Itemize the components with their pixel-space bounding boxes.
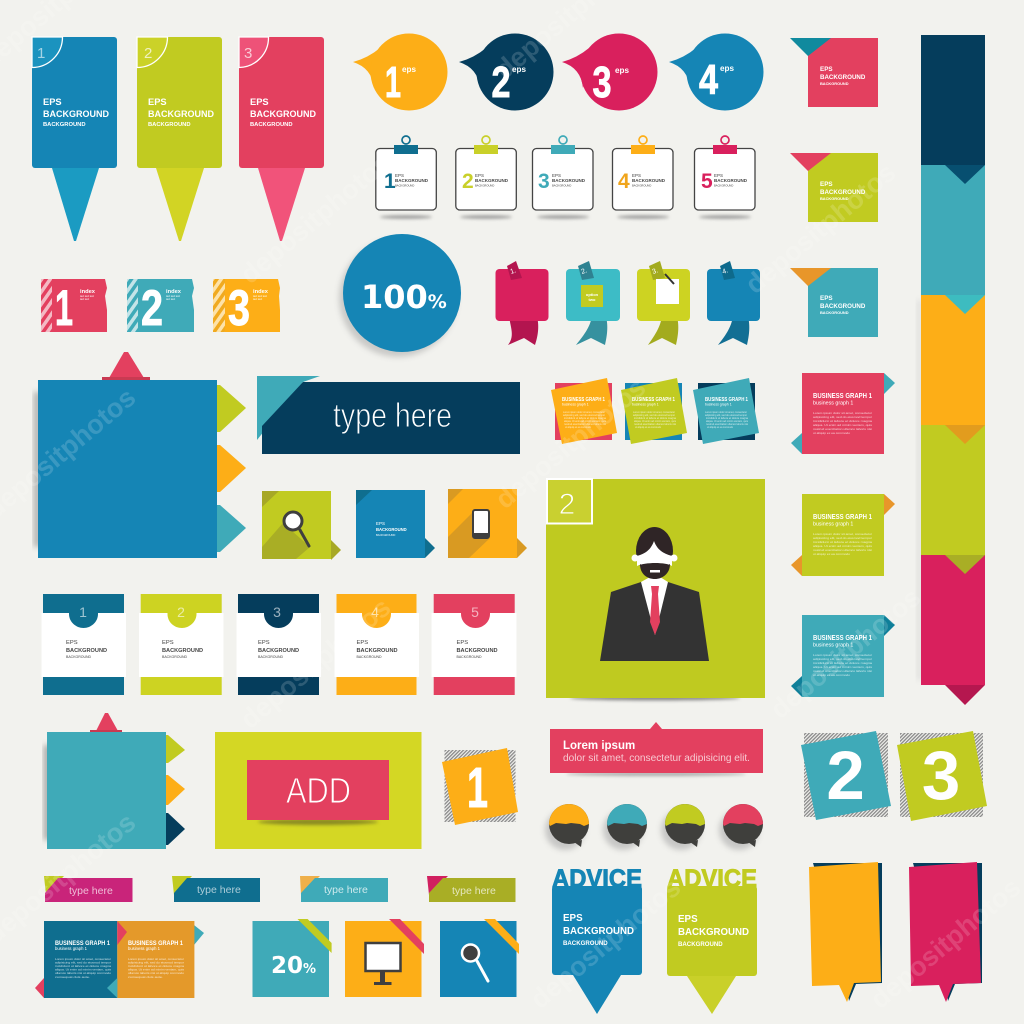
rotated note teal: BUSINESS GRAPH 1 [705,397,748,403]
clipboard note 4: EPS [632,173,641,178]
card 20 percent: 20% [271,953,316,979]
fold card teal: BACKGROUND [820,303,866,310]
pointer tag 3: 3 [244,45,252,62]
number note 1: 1 [467,756,488,820]
mini label 3 [300,876,388,902]
numbered card 2 [139,594,224,695]
split bubble red [719,804,763,850]
clipboard note 1: BACKGROUND [395,178,429,183]
pointer tag 3 [239,37,324,241]
numbered card 2: BACKGROUND [162,648,203,654]
double info card: ullamco laboris nisi ut aliquip commodo [55,971,111,975]
fold card red: BACKGROUND [820,81,849,86]
double info card: BUSINESS GRAPH 1 [128,940,183,947]
numbered sticker 2: 2 [141,280,163,336]
rotated note olive: aliqua. Ut enim ad minim veniam, quis [634,419,676,423]
rotated note orange: business graph 1 [562,402,589,406]
ribbon badge blue: 4. [721,267,729,276]
lorem ipsum banner: dolor sit amet, consectetur adipisicing elit. [563,753,750,764]
numbered card 1 [42,594,126,695]
fold card teal: EPS [820,295,833,302]
mini label 2: type here [197,884,241,896]
clipboard note 2 [456,136,516,219]
rotated note olive [621,378,687,444]
fold card red: EPS [820,66,833,73]
numbered sticker 3: index [253,289,268,295]
numbered card 4: 4 [371,604,379,620]
ribbon badge olive [637,261,690,345]
numbered sticker 3: text text [253,297,262,301]
rotated note olive: incididunt ut labore et dolore magna [634,416,676,420]
info card olive: Lorem ipsum dolor sit amet, consectetur [813,532,872,536]
ribbon badge teal [566,261,620,345]
clipboard note 3: BACKGROUND [552,178,586,183]
lorem ipsum banner: Lorem ipsum [563,740,635,752]
info card olive: ut aliquip ex ea commodo [813,552,850,556]
rotated note teal: adipisicing elit, sed do eiusmod tempor [705,413,747,417]
percent circle 100%: 100% [361,278,447,316]
mini label 2 [172,876,260,902]
clipboard note 1: EPS [395,173,404,178]
speech bubble 1 [353,34,448,110]
rotated note teal: incididunt ut labore et dolore magna [706,416,748,420]
number note 3: 3 [922,737,960,814]
numbered card 3: EPS [258,640,270,646]
watermark: depositphotos [235,592,396,735]
double info card: aliqua. Ut enim ad minim veniam, quis [128,968,185,972]
speech bubble 4 [669,34,764,110]
numbered sticker 1: index [80,289,95,295]
number note 2 [801,731,891,820]
ribbon badge teal: 2. [580,267,588,276]
pointer tag 3: EPS [250,97,269,107]
double info card: consequat duis aute. [55,975,90,979]
info card teal: business graph 1 [813,642,853,648]
info card teal: BUSINESS GRAPH 1 [813,633,872,642]
info card teal: aliqua. Ut enim ad minim veniam, quis [813,665,873,669]
double info card: ullamco laboris nisi ut aliquip commodo [128,971,184,975]
fold card olive: BACKGROUND [820,189,866,196]
card monitor [345,919,424,997]
numbered card 5: BACKGROUND [456,655,482,659]
clipboard note 3: 3 [538,170,550,193]
rotated note orange: aliqua. Ut enim ad minim veniam, quis [564,419,606,423]
clipboard note 2: 2 [462,170,474,193]
speech bubble 3: 3 [592,58,612,107]
icon card blue text [356,490,435,558]
advice tag blue: EPS [563,913,583,924]
advice tag blue: BACKGROUND [563,926,634,937]
numbered card 2: EPS [162,640,174,646]
ribbon badge magenta [496,261,548,345]
lorem ipsum banner [550,722,763,776]
icon: businessman [600,527,709,661]
double info card: aliqua. Ut enim ad minim veniam, quis [55,968,112,972]
info card red: incididunt ut labore et dolore magna [813,419,872,423]
segment olive [921,425,985,555]
right half [117,921,194,998]
fold card olive: BACKGROUND [820,196,849,201]
split bubble teal [603,804,647,850]
pointer tag 2: BACKGROUND [148,122,191,128]
rotated note orange [551,378,617,444]
icon card magnifier [262,491,341,560]
pointer tag 2: 2 [144,45,152,62]
info card olive: incididunt ut labore et dolore magna [813,540,872,544]
icon card blue text: EPS [376,521,385,526]
advice tag blue [552,865,642,1014]
teal note with tabs [44,713,185,849]
mini label 1 [44,876,132,902]
tab olive [166,735,185,763]
icon card phone [448,489,527,558]
rotated note olive: nostrud exercitation ullamco laboris nisi [634,422,676,426]
speech bubble 4: eps [720,64,735,73]
pointer tag 3: BACKGROUND [250,109,316,119]
numbered card 5: EPS [456,640,468,646]
watermark: depositphotos [765,582,926,725]
split bubble olive [661,804,705,850]
clipboard note 5: BACKGROUND [714,184,733,188]
double info card: incididunt ut labore et dolore magna [128,964,184,968]
info card teal: Lorem ipsum dolor sit amet, consectetur [813,653,872,657]
numbered sticker 2: text text [166,297,175,301]
rotated note orange: ut aliquip ex ea commodo [565,425,591,429]
speech bubble 1: 1 [385,58,401,107]
mini label 4: type here [452,885,496,897]
pointer tag 2: BACKGROUND [148,109,214,119]
icon card blue text: BACKGROUND [376,527,407,532]
number note 3 [897,731,987,821]
rotated note teal: Lorem ipsum dolor sit amet, consectetur [705,410,747,414]
info card teal: adipisicing elit, sed do eiusmod tempor [813,657,872,661]
advice tag olive: EPS [678,914,698,925]
speech bubble 2: 2 [492,58,510,107]
card 20 percent [252,919,332,997]
numbered card 4 [334,594,419,695]
rotated note olive: ut aliquip ex ea commodo [635,425,661,429]
info card olive: aliqua. Ut enim ad minim veniam, quis [813,544,873,548]
clipboard note 3 [532,136,593,219]
numbered sticker 2: index [166,289,181,295]
segment navy [921,35,985,165]
clipboard note 2: EPS [475,173,484,178]
info card red [791,373,895,454]
double info card: incididunt ut labore et dolore magna [55,964,111,968]
left half [44,921,117,998]
ribbon badge teal: two [589,297,596,302]
speech bubble 3 [562,34,658,110]
advice tag olive [667,865,757,1014]
rotated note teal: aliqua. Ut enim ad minim veniam, quis [706,419,748,423]
numbered sticker 1: text text text [80,294,94,298]
pointer tag 2: EPS [148,97,167,107]
advice tag olive: BACKGROUND [678,927,749,938]
numbered card 5: 5 [471,604,479,620]
icon card blue text: BACKGROUND [376,533,395,537]
mini label 3: type here [324,884,368,896]
clipboard note 4 [612,136,673,219]
info card teal: incididunt ut labore et dolore magna [813,661,872,665]
clipboard note 4: BACKGROUND [632,178,666,183]
type here banner navy [257,376,520,454]
fold arrow navy [945,165,985,184]
numbered card 4: EPS [356,640,368,646]
fold card olive: EPS [820,181,833,188]
info card olive: business graph 1 [813,522,853,528]
numbered card 4: BACKGROUND [356,648,398,654]
number note 2: 2 [826,737,865,814]
numbered sticker 2: text text text [166,294,180,298]
numbered sticker 3 [213,279,280,336]
number box [547,479,592,524]
advice tag olive: BACKGROUND [678,941,723,948]
add button panel: ADD [286,770,351,811]
clipboard note 5 [694,136,755,219]
numbered card 3: BACKGROUND [258,648,299,654]
ribbon badge olive: 3. [651,267,659,276]
clipboard note 3: EPS [552,173,561,178]
speech bubble 4: 4 [699,56,719,103]
rotated note orange: nostrud exercitation ullamco laboris nisi [564,422,606,426]
speech bubble 1: eps [402,65,417,74]
ribbon badge teal: option [586,292,599,297]
card magnifier [440,919,519,997]
fold card olive [790,153,878,222]
add button panel [215,732,422,849]
speech note orange [809,862,882,1002]
type here banner navy: type here [333,397,452,435]
pointer tag 1: 1 [37,45,45,62]
clipboard note 1: BACKGROUND [395,184,414,188]
rotated note olive: business graph 1 [632,402,659,406]
numbered sticker 1: 1 [55,280,73,336]
rotated note teal: nostrud exercitation ullamco laboris nisi [706,422,748,426]
numbered card 2: 2 [177,604,185,620]
rotated note orange: incididunt ut labore et dolore magna [564,416,606,420]
numbered card 1: BACKGROUND [66,648,107,654]
info card teal: nostrud exercitation ullamco laboris nisi [813,669,872,673]
pointer tag 2 [137,37,222,241]
fold arrow olive [945,555,985,574]
segment teal [921,165,985,295]
clipboard note 1: 1 [384,170,396,193]
double info card: business graph 1 [128,946,161,951]
segment magenta [921,555,985,685]
double info card: Lorem ipsum dolor sit amet, consectetur [128,957,184,961]
segment orange [921,295,985,425]
numbered sticker 1 [41,279,107,336]
double info card: Lorem ipsum dolor sit amet, consectetur [55,957,111,961]
info card red: BUSINESS GRAPH 1 [813,391,872,400]
advice tag olive: ADVICE [667,865,757,893]
clipboard note 4: 4 [618,170,630,193]
split bubble orange [545,804,589,850]
watermark: depositphotos [525,872,686,1015]
info card red: ut aliquip ex ea commodo [813,431,850,435]
number note 1 [442,748,518,825]
mini label 4 [427,876,516,902]
numbered card 3 [236,594,321,695]
pointer tag 1: EPS [43,97,62,107]
rotated note teal: business graph 1 [705,402,732,406]
numbered card 1: 1 [79,604,87,620]
watermark: depositphotos [490,372,651,515]
panel: person card: 2 [559,488,575,521]
ribbon badge blue [707,261,760,345]
rotated note olive: Lorem ipsum dolor sit amet, consectetur [633,410,675,414]
pointer tag 1: BACKGROUND [43,109,109,119]
numbered card 1: BACKGROUND [66,655,92,659]
clipboard note 5: EPS [714,173,723,178]
info card red: nostrud exercitation ullamco laboris nisi [813,427,872,431]
info card olive [791,494,895,576]
numbered sticker 2 [127,279,194,336]
numbered card 3: BACKGROUND [258,655,284,659]
pointer tag 1: BACKGROUND [43,122,86,128]
info card red: business graph 1 [813,400,853,406]
watermark: depositphotos [740,157,901,300]
numbered sticker 3: 3 [228,280,250,336]
fold card teal: BACKGROUND [820,310,849,315]
clipboard note 4: BACKGROUND [632,184,651,188]
rotated note orange: adipisicing elit, sed do eiusmod tempor [563,413,605,417]
watermark: depositphotos [865,872,1024,1015]
advice tag blue: BACKGROUND [563,940,608,947]
fold card teal [790,268,878,337]
speech note magenta [909,862,982,1002]
clipboard note 5: 5 [701,170,713,193]
info card olive: nostrud exercitation ullamco laboris nisi [813,548,872,552]
watermark: depositphotos [235,147,396,290]
numbered card 3: 3 [273,604,281,620]
info card red: Lorem ipsum dolor sit amet, consectetur [813,411,872,415]
numbered card 5 [432,594,516,695]
numbered sticker 1: text text [80,297,89,301]
tab orange [166,775,185,805]
numbered card 4: BACKGROUND [356,655,382,659]
speech bubble 3: eps [615,66,630,75]
double info card [35,921,204,998]
numbered card 1: EPS [66,640,78,646]
rotated note orange: BUSINESS GRAPH 1 [562,397,605,403]
numbered card 2: BACKGROUND [162,655,188,659]
fold arrow orange [945,425,985,444]
double info card: BUSINESS GRAPH 1 [55,940,110,947]
rotated note teal [693,378,759,444]
tall segmented banner [917,35,985,705]
tab teal [217,505,246,552]
info card red: aliqua. Ut enim ad minim veniam, quis [813,423,873,427]
double info card: business graph 1 [55,946,88,951]
fold arrow teal [945,295,985,314]
clipboard note 5: BACKGROUND [714,178,748,183]
rotated note orange: Lorem ipsum dolor sit amet, consectetur [563,410,605,414]
numbered card 5: BACKGROUND [456,648,498,654]
info card olive: BUSINESS GRAPH 1 [813,512,872,521]
double info card: adipisicing elit, sed do eiusmod tempor [55,960,111,964]
advice tag blue: ADVICE [552,865,642,893]
fold card red [790,38,878,107]
info card olive: adipisicing elit, sed do eiusmod tempor [813,536,872,540]
info card teal: ut aliquip ex ea commodo [813,673,850,677]
speech bubble 2 [459,34,554,110]
info card red: adipisicing elit, sed do eiusmod tempor [813,415,872,419]
rotated note olive: BUSINESS GRAPH 1 [632,397,675,403]
tab olive [217,385,246,432]
rotated note olive: adipisicing elit, sed do eiusmod tempor [633,413,675,417]
large blue note with tabs [34,352,246,558]
ribbon badge magenta: 1. [509,267,517,276]
fold card red: BACKGROUND [820,74,866,81]
tab navy [166,813,185,845]
percent circle 100% [339,234,461,357]
pointer tag 3: BACKGROUND [250,122,293,128]
double info card: consequat duis aute. [128,975,163,979]
rotated note teal: ut aliquip ex ea commodo [707,425,733,429]
fold arrow magenta [945,685,985,705]
numbered sticker 3: text text text [253,294,267,298]
pointer tag 1 [32,37,117,241]
mini label 1: type here [69,885,113,897]
speech bubble 2: eps [512,65,527,74]
clipboard note 1 [376,136,436,219]
panel: person card [546,479,765,700]
tab orange [217,445,246,492]
clipboard note 2: BACKGROUND [475,184,494,188]
clipboard note 3: BACKGROUND [552,184,571,188]
clipboard note 2: BACKGROUND [475,178,509,183]
double info card: adipisicing elit, sed do eiusmod tempor [128,960,184,964]
info card teal [791,615,895,697]
